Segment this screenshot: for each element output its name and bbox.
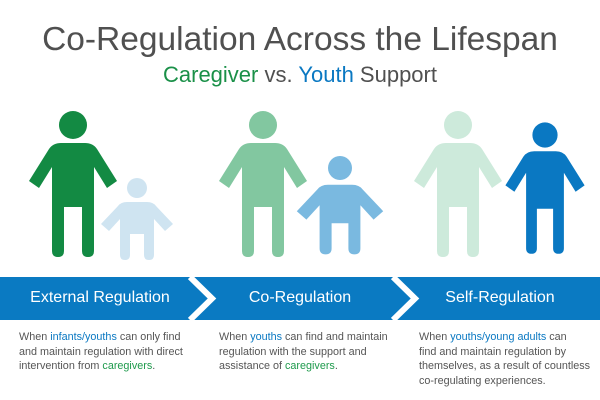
text: co: assistance of caregivers. [219, 360, 338, 372]
text: self: find and maintain regulation by [419, 346, 566, 358]
text: co: regulation with the support and [219, 346, 367, 358]
stage labels: Self-Regulation [445, 289, 555, 306]
subtitle: Caregiver vs. Youth Support [163, 62, 437, 87]
title: Co-Regulation Across the Lifespan [42, 21, 558, 58]
text: external: and maintain regulation with direct [19, 346, 183, 358]
text: external [19, 331, 183, 372]
figure group: external regulation [29, 111, 173, 260]
banner [0, 277, 600, 320]
stage labels: Co-Regulation [249, 289, 351, 306]
text: self [419, 331, 590, 386]
text: self: co-regulating experiences. [419, 374, 546, 386]
figure group: co-regulation [219, 111, 383, 257]
text: self: When youths/young adults can [419, 331, 567, 343]
stage labels [30, 289, 555, 306]
text: co: When youths can find and maintain [219, 331, 388, 343]
text: external: intervention from caregivers. [19, 360, 155, 372]
stage labels: External Regulation [30, 289, 170, 306]
text: external: When infants/youths can only find [19, 331, 180, 343]
figure group: self-regulation [414, 111, 585, 257]
text: self: themselves, as a result of countless [419, 360, 590, 372]
text: co [219, 331, 388, 372]
